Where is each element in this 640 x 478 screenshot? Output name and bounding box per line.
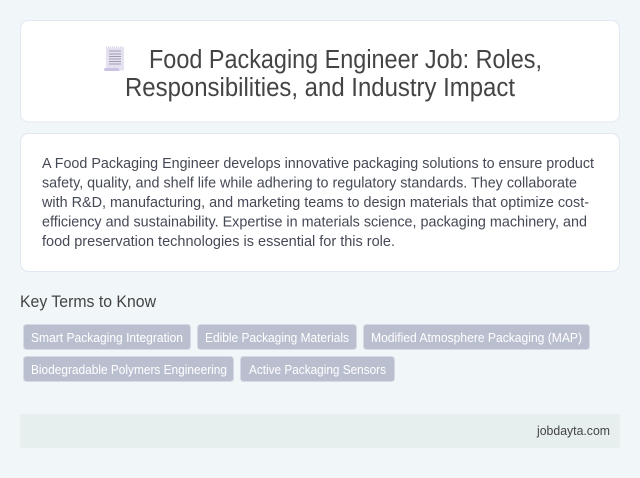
tag: modified atmosphere bbox=[364, 324, 590, 350]
description text: food preservation technologies is essential for this role. bbox=[42, 233, 395, 250]
description text bbox=[41, 155, 595, 250]
tag: biodegradable polymers: Biodegradable Polymers Engineering bbox=[31, 362, 227, 377]
title: Responsibilities, and Industry Impact bbox=[125, 74, 515, 102]
description text: safety, quality, and shelf life while adhering to regulatory standards. They collaborate bbox=[42, 174, 577, 192]
footer: jobdayta.com bbox=[536, 424, 610, 438]
tag: edible packaging bbox=[198, 324, 356, 350]
description text: efficiency and sustainability. Expertise in materials science, packaging machinery, and bbox=[42, 214, 587, 230]
panel: description bbox=[20, 134, 620, 272]
tag: smart packaging bbox=[24, 324, 190, 350]
tag list bbox=[24, 324, 590, 382]
tag: edible packaging: Edible Packaging Materials bbox=[205, 330, 349, 345]
tag: active packaging bbox=[240, 356, 394, 382]
footer bbox=[20, 414, 620, 448]
tag: biodegradable polymers bbox=[24, 356, 234, 382]
title: Food Packaging Engineer Job: Roles, bbox=[149, 46, 542, 74]
icon: document receipt bbox=[104, 47, 124, 71]
panel: title card bbox=[20, 20, 620, 122]
tag: modified atmosphere: Modified Atmosphere Packaging (MAP) bbox=[371, 330, 582, 345]
description text: A Food Packaging Engineer develops innovative packaging solutions to ensure product bbox=[42, 155, 595, 172]
tag: smart packaging: Smart Packaging Integration bbox=[31, 330, 183, 345]
heading: key terms: Key Terms to Know bbox=[20, 293, 156, 311]
title bbox=[125, 46, 542, 102]
tag: active packaging: Active Packaging Sensors bbox=[249, 362, 386, 377]
description text: with R&D, manufacturing, and marketing teams to design materials that optimize cost- bbox=[41, 194, 589, 211]
